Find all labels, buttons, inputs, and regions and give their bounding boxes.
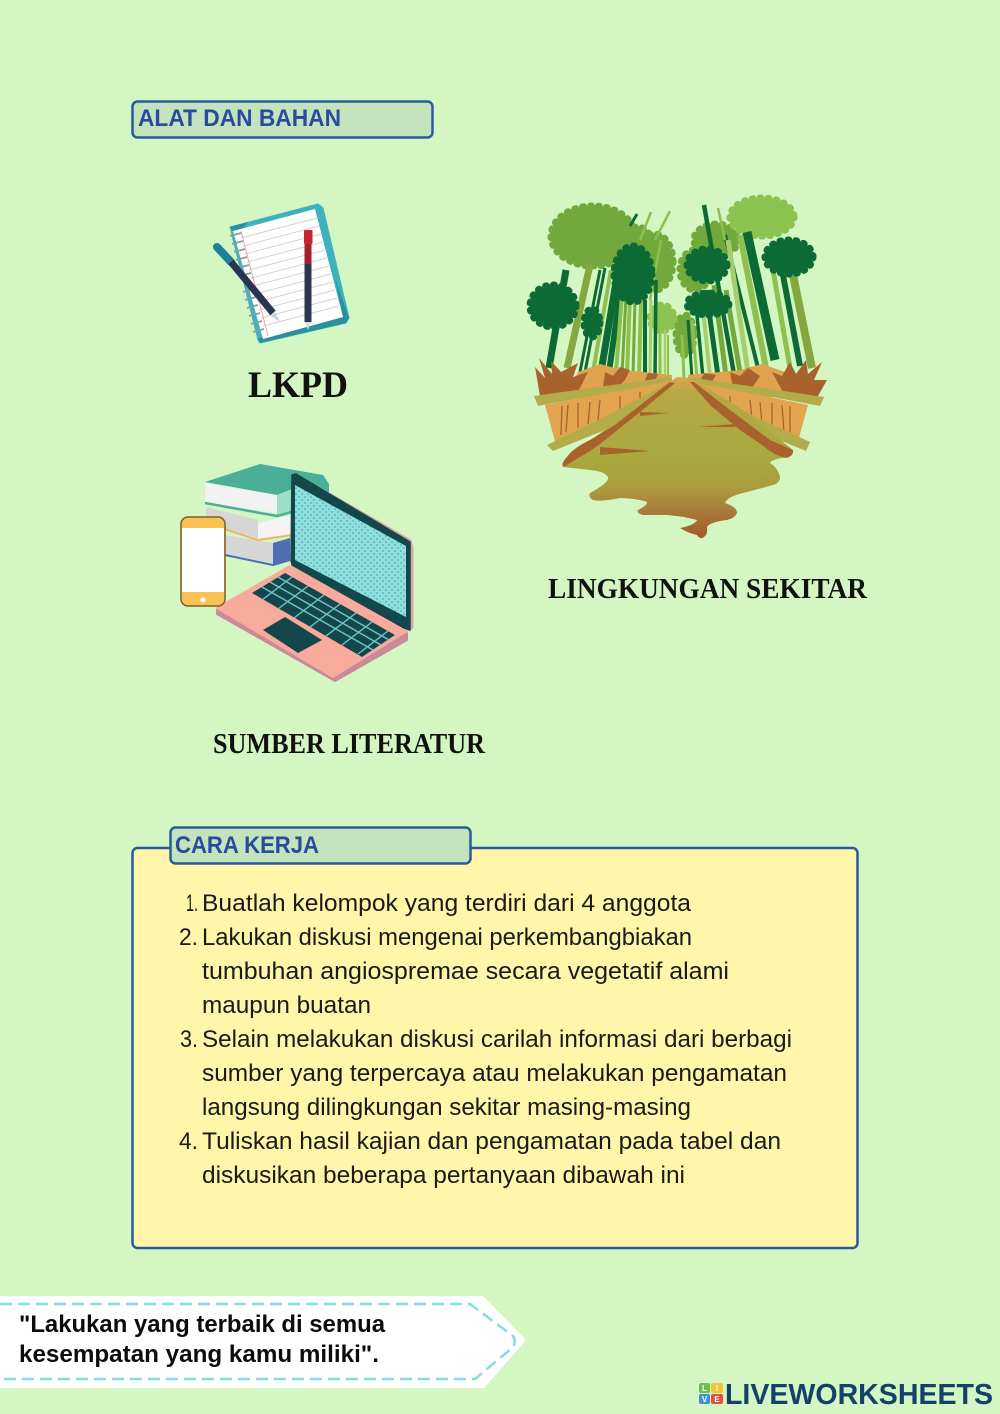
callout: quote banner: [0, 1296, 526, 1388]
logo: liveworksheets: I: [716, 1384, 718, 1393]
heading: alat dan bahan: ALAT DAN BAHAN: [138, 105, 341, 132]
label: lingkungan sekitar: LINGKUNGAN SEKITAR: [548, 573, 868, 605]
phone: [181, 517, 225, 606]
label: sumber literatur: SUMBER LITERATUR: [213, 729, 486, 760]
logo: liveworksheets: LIVEWORKSHEETS: [725, 1379, 993, 1411]
icon: books, phone and laptop: [181, 464, 413, 681]
callout: quote banner: "Lakukan yang terbaik di semua: [19, 1311, 386, 1338]
illustration: bamboo forest path: [530, 198, 827, 538]
road shadows: [562, 382, 793, 467]
logo: liveworksheets: L: [702, 1384, 707, 1393]
dark canopies: [530, 240, 813, 337]
numbered steps: diskusikan beberapa pertanyaan dibawah ini: [202, 1162, 685, 1189]
numbered steps: Tuliskan hasil kajian dan pengamatan pada tabel dan: [202, 1128, 781, 1155]
heading: alat dan bahan: [132, 102, 432, 138]
numbered steps: 2.: [179, 924, 198, 951]
laptop base: [217, 567, 407, 681]
laptop screen: [296, 474, 413, 631]
stack of books: [205, 464, 329, 565]
right fence: [688, 380, 808, 445]
heading: cara kerja: [170, 828, 470, 864]
logo: liveworksheets: E: [714, 1395, 720, 1404]
bamboo stems left: [549, 211, 670, 378]
numbered steps: langsung dilingkungan sekitar masing-masing: [202, 1094, 691, 1121]
logo: liveworksheets: V: [702, 1395, 708, 1404]
panel: cara kerja: [132, 828, 858, 1248]
left fence: [545, 380, 672, 445]
grass tufts: [535, 358, 827, 396]
numbered steps: Lakukan diskusi mengenai perkembangbiakan: [202, 924, 692, 951]
numbered steps: sumber yang terpercaya atau melakukan pengamatan: [202, 1060, 787, 1087]
numbered steps: Buatlah kelompok yang terdiri dari 4 anggota: [202, 890, 692, 917]
rear canopies: [551, 206, 738, 355]
road: [563, 377, 793, 538]
numbered steps: 3.: [180, 1026, 198, 1053]
label: LKPD: LKPD: [248, 365, 348, 406]
heading: cara kerja: CARA KERJA: [175, 832, 319, 859]
grass mounds: [566, 364, 796, 397]
numbered steps: 1.: [186, 890, 198, 917]
numbered steps: Selain melakukan diskusi carilah informasi dari berbagi: [202, 1026, 792, 1053]
numbered steps: 4.: [179, 1128, 198, 1155]
numbered steps: tumbuhan angiospremae secara vegetatif alami: [202, 958, 729, 985]
icon: notebook and pens: [217, 204, 349, 343]
numbered steps: maupun buatan: [202, 992, 371, 1019]
callout: quote banner: kesempatan yang kamu miliki".: [19, 1341, 379, 1368]
numbered steps: [179, 890, 792, 1189]
bamboo stems right: [682, 205, 812, 378]
